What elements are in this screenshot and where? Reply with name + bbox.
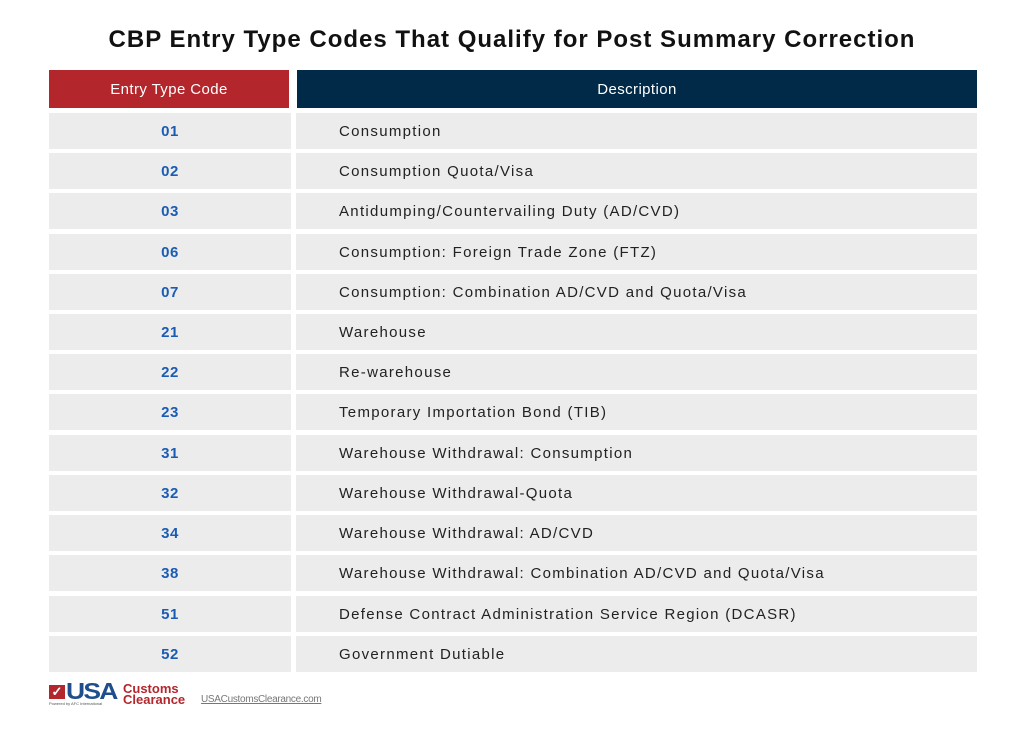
header: description [297, 70, 977, 108]
table rows: Defense Contract Administration Service Region (DCASR) [339, 606, 797, 622]
logo: Powered by AFC International [49, 701, 102, 706]
table rows: 32 [161, 484, 179, 502]
logo: USA [66, 678, 117, 704]
table rows: Consumption: Combination AD/CVD and Quota/Visa [339, 284, 747, 300]
logo: Clearance [123, 692, 185, 707]
title: CBP Entry Type Codes That Qualify for Post Summary Correction [109, 26, 915, 53]
table rows: Warehouse Withdrawal: Combination AD/CVD and Quota/Visa [339, 564, 825, 582]
table rows: 51 [161, 606, 179, 622]
logo [49, 678, 185, 707]
table rows: 23 [161, 404, 179, 420]
table rows: Warehouse Withdrawal: AD/CVD [339, 524, 594, 542]
header: entry type code [49, 70, 289, 108]
icon: checkbox [49, 685, 65, 699]
table rows: Antidumping/Countervailing Duty (AD/CVD) [339, 202, 680, 220]
logo: Customs [123, 681, 179, 696]
table rows: Consumption Quota/Visa [339, 162, 534, 180]
table rows: Re-warehouse [339, 364, 452, 380]
table rows: 38 [161, 564, 179, 582]
table rows: Consumption [339, 122, 442, 140]
table rows: 07 [161, 284, 179, 300]
table rows: 01 [161, 122, 179, 140]
table rows: 31 [161, 444, 179, 462]
header: entry type code: Entry Type Code [110, 80, 228, 98]
table rows: Warehouse Withdrawal: Consumption [339, 444, 633, 462]
table rows: 02 [161, 162, 179, 180]
table rows: Temporary Importation Bond (TIB) [339, 404, 607, 420]
table rows: 34 [161, 524, 179, 542]
table rows: Warehouse Withdrawal-Quota [339, 484, 573, 502]
table rows: 21 [161, 324, 179, 340]
table rows: 52 [161, 646, 179, 662]
website link: USACustomsClearance.com [201, 694, 321, 705]
table rows: 03 [161, 202, 179, 220]
table rows: 06 [161, 244, 179, 260]
table rows: Government Dutiable [339, 646, 505, 662]
header: description: Description [597, 80, 677, 98]
table rows: 22 [161, 364, 179, 380]
icon: checkbox: ✓ [52, 684, 62, 699]
table rows: Warehouse [339, 324, 427, 340]
table rows: Consumption: Foreign Trade Zone (FTZ) [339, 244, 657, 260]
